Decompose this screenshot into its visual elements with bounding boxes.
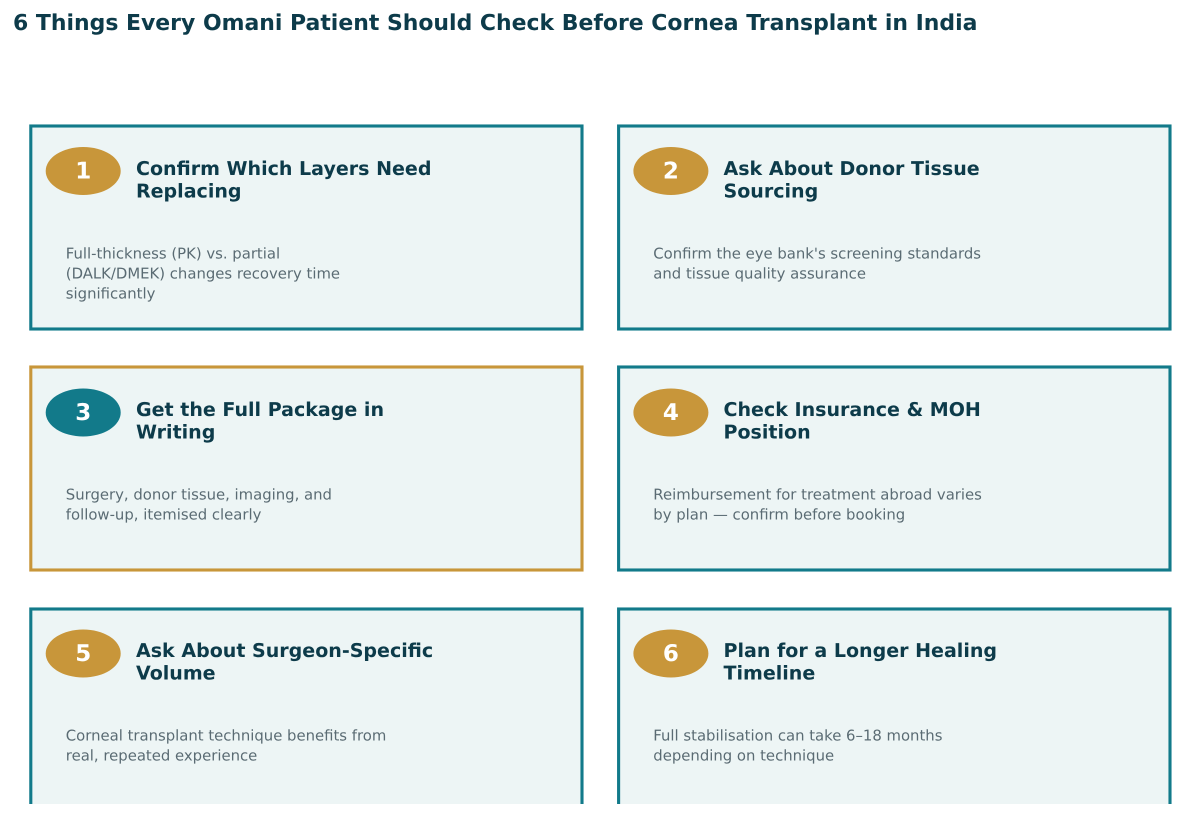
body 2: Confirm the eye bank's screening standards xyxy=(653,244,981,262)
badge 2 xyxy=(633,147,708,195)
panel: card 3 xyxy=(31,367,582,570)
body 5: real, repeated experience xyxy=(66,746,257,764)
body 6: depending on technique xyxy=(653,746,834,764)
body 1: significantly xyxy=(66,284,156,302)
panel: card 2 xyxy=(619,126,1170,329)
heading 6: Timeline xyxy=(724,662,815,684)
heading 4: Position xyxy=(724,422,811,444)
heading 6: Plan for a Longer Healing xyxy=(724,640,997,662)
checklist cards xyxy=(31,126,1170,812)
body 5: Corneal transplant technique benefits from xyxy=(66,726,386,744)
badge 6: 6 xyxy=(663,641,679,667)
panel: card 6 xyxy=(619,609,1170,812)
panel: card 1 xyxy=(31,126,582,329)
heading 5: Volume xyxy=(136,662,216,684)
badge 1 xyxy=(46,147,121,195)
panel: card 4 xyxy=(619,367,1170,570)
body 4: by plan — confirm before booking xyxy=(653,506,905,524)
badge 5 xyxy=(46,630,121,678)
heading 1: Replacing xyxy=(136,180,242,202)
badge 5: 5 xyxy=(75,641,91,667)
heading 2: Ask About Donor Tissue xyxy=(724,158,980,180)
heading 4: Check Insurance & MOH xyxy=(724,399,981,421)
heading 1: Confirm Which Layers Need xyxy=(136,158,431,180)
badge 1: 1 xyxy=(75,158,91,184)
heading 3: Get the Full Package in xyxy=(136,399,384,421)
body 1: Full-thickness (PK) vs. partial xyxy=(66,244,280,262)
title: 6 Things Every Omani Patient Should Check Before Cornea Transplant in India xyxy=(13,11,977,36)
badge 6 xyxy=(633,630,708,678)
body 3: Surgery, donor tissue, imaging, and xyxy=(66,486,332,504)
badge 3 xyxy=(46,388,121,436)
body 3: follow-up, itemised clearly xyxy=(66,506,262,524)
badge 4: 4 xyxy=(663,400,679,426)
panel: card 5 xyxy=(31,609,582,812)
body 2: and tissue quality assurance xyxy=(653,264,866,282)
badge 3: 3 xyxy=(75,400,91,426)
heading 5: Ask About Surgeon-Specific xyxy=(136,640,433,662)
body 4: Reimbursement for treatment abroad varies xyxy=(653,486,982,504)
body 6: Full stabilisation can take 6–18 months xyxy=(653,726,943,744)
badge 2: 2 xyxy=(663,158,679,184)
heading 2: Sourcing xyxy=(724,180,818,202)
body 1: (DALK/DMEK) changes recovery time xyxy=(66,264,340,282)
heading 3: Writing xyxy=(136,422,215,444)
badge 4 xyxy=(633,388,708,436)
